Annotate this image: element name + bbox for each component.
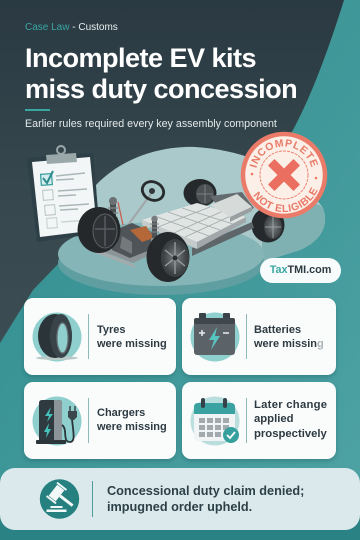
- subtitle: Earlier rules required every key assembly component: [25, 118, 277, 130]
- verdict text: [107, 484, 304, 514]
- verdict text: Concessional duty claim denied;: [107, 484, 304, 498]
- illustration: EV chassis: [78, 179, 284, 282]
- battery pack: [142, 194, 252, 249]
- card: batteries: [182, 298, 336, 375]
- motor assembly: [88, 197, 159, 268]
- title: Incomplete EV kits: [25, 42, 256, 73]
- title: miss duty concession: [25, 73, 297, 104]
- stamp: incomplete, not eligible: INCOMPLETE: [250, 139, 318, 168]
- label: were missing: [97, 421, 167, 433]
- accent rule: [25, 109, 50, 110]
- label: Batteries: [254, 324, 301, 336]
- header: category label: Case Law - Customs: [25, 22, 118, 33]
- label: Tyres: [97, 324, 126, 336]
- title: [25, 42, 297, 104]
- brand pill: [260, 258, 341, 283]
- label: [97, 407, 167, 433]
- label: [97, 324, 167, 350]
- label: prospectively: [254, 428, 327, 440]
- label: Later change: [254, 399, 327, 411]
- band under verdict: [0, 510, 360, 540]
- stamp: incomplete, not eligible: [240, 132, 328, 218]
- illustration: platform: [58, 146, 326, 295]
- verdict text: impugned order upheld.: [107, 500, 252, 514]
- rear wheels: [184, 179, 284, 242]
- frame rails: [192, 222, 254, 256]
- icon: gavel: [40, 479, 80, 519]
- card: chargers: [24, 382, 176, 459]
- icon: charger: [32, 396, 82, 446]
- stamp: incomplete, not eligible: NOT ELIGIBLE: [253, 187, 318, 212]
- front wheels: [78, 207, 190, 282]
- icon: tyre: [32, 312, 82, 362]
- card: later change: [182, 382, 336, 459]
- card: tyres: [24, 298, 176, 375]
- steering column: [118, 178, 167, 225]
- label: applied: [254, 413, 294, 425]
- brand pill: TaxTMI.com: [270, 264, 331, 276]
- verdict banner: [0, 468, 360, 530]
- label: [254, 399, 327, 440]
- label: were missing: [97, 338, 167, 350]
- icon: battery: [190, 312, 240, 362]
- label: were missing: [254, 338, 324, 350]
- icon: calendar: [190, 396, 240, 446]
- label: [254, 324, 324, 350]
- icon: clipboard checklist: [32, 145, 98, 242]
- label: Chargers: [97, 407, 145, 419]
